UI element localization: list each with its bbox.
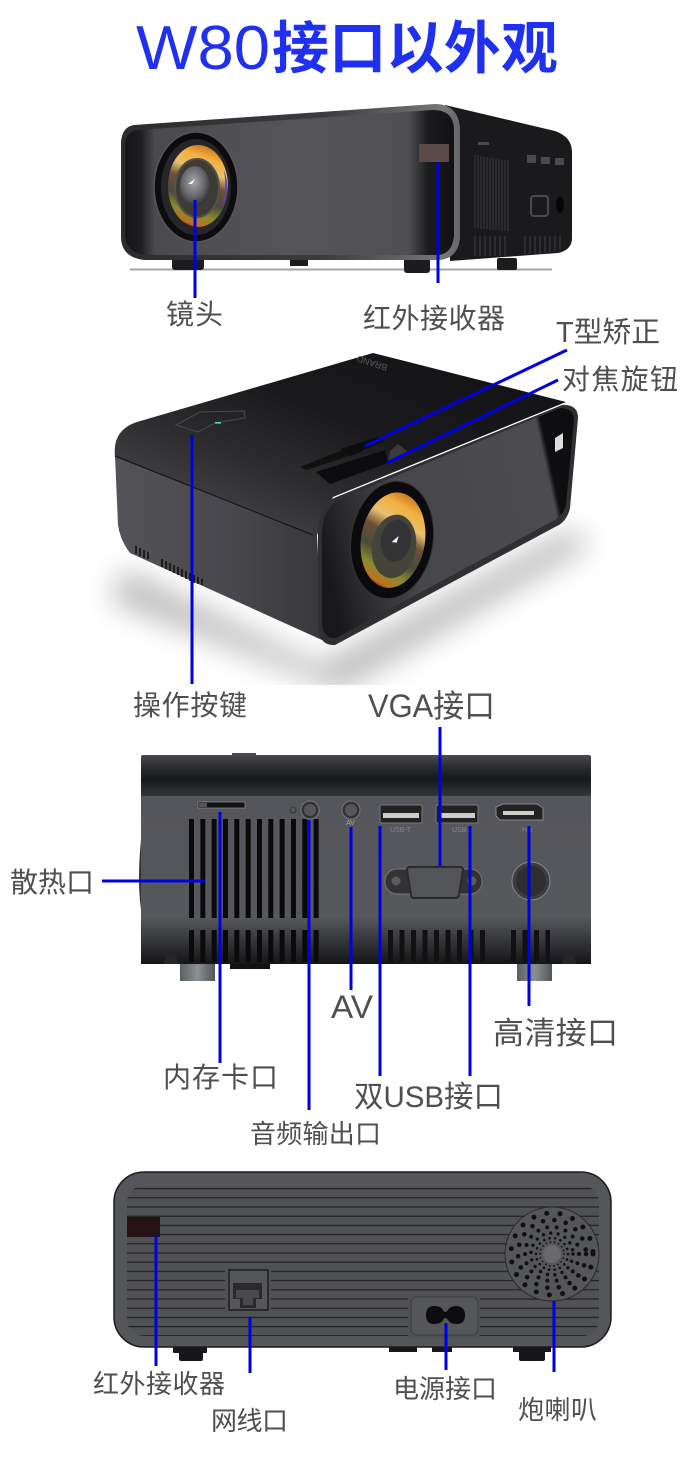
label: memory card: 内存卡口 (163, 1062, 278, 1093)
left side face (115, 456, 322, 640)
top face (115, 353, 566, 535)
label: buttons: 操作按键 (133, 690, 247, 721)
body (141, 796, 591, 964)
ethernet port (225, 1266, 271, 1314)
grooves (127, 1186, 599, 1336)
side ports (478, 142, 564, 216)
indicator (215, 422, 221, 424)
label: lens: 镜头 (166, 299, 223, 330)
usb port 2: USB (452, 827, 467, 834)
top controls (300, 437, 408, 484)
usb port 1 (380, 805, 422, 834)
leader line: T keystone (365, 350, 567, 446)
title: W80 (136, 14, 270, 83)
usb port 2 (436, 805, 478, 834)
panel: front view projector (121, 104, 572, 273)
leader line: HD (528, 826, 530, 1006)
leader line: VGA (438, 727, 442, 866)
leader line: USB left (378, 826, 382, 1076)
leader line: network (248, 1317, 252, 1373)
av jack (342, 801, 360, 827)
label: HD: 高清接口 (493, 1016, 618, 1051)
title: 接口以外观 (272, 17, 558, 81)
infrared window (127, 1217, 160, 1237)
corner screws (164, 954, 576, 964)
lens (350, 481, 434, 598)
leader line: audio (308, 820, 310, 1110)
leader line: infrared receiver (436, 162, 440, 283)
side vents (475, 155, 560, 256)
label: AV: AV (331, 989, 374, 1025)
label: VGA: VGA接口 (368, 688, 495, 724)
vga port (385, 867, 482, 898)
hdmi port: HD (522, 827, 532, 834)
feet (180, 962, 552, 981)
power socket (408, 1294, 480, 1338)
leader line: power (444, 1323, 448, 1370)
front face (121, 104, 460, 260)
title (136, 14, 558, 83)
label: rear infrared: 红外接收器 (93, 1369, 225, 1399)
label: power: 电源接口 (393, 1374, 497, 1404)
leader line: lens (194, 200, 196, 298)
round knob (512, 862, 550, 900)
body (114, 1172, 611, 1347)
vents (136, 546, 202, 585)
speaker grille (505, 1207, 599, 1301)
panel: side view projector (139, 753, 591, 981)
side body (445, 105, 572, 261)
cooling vents (189, 868, 550, 946)
upper band (141, 755, 591, 796)
leader line: USB right (468, 826, 472, 1076)
label: dual USB: 双USB接口 (354, 1081, 503, 1114)
leader line: AV (350, 827, 352, 990)
label: speaker: 炮喇叭 (518, 1395, 597, 1425)
av jack: AV (346, 820, 355, 827)
lens hint (139, 840, 141, 910)
ops buttons (176, 411, 245, 432)
infrared receiver (419, 144, 449, 162)
ground shadow (130, 268, 552, 270)
memory slot (198, 802, 245, 808)
usb port 1: USB-T (390, 827, 412, 834)
label: infrared receiver: 红外接收器 (363, 303, 505, 334)
hdmi port (496, 804, 543, 834)
top bump (232, 753, 256, 756)
leader line: memory card (218, 812, 222, 1063)
lens (154, 132, 238, 242)
front face (318, 405, 578, 645)
feet (173, 1345, 551, 1361)
panel: top view projector (110, 353, 590, 690)
audio jack (290, 801, 319, 819)
label: network: 网线口 (211, 1406, 288, 1436)
panel: back view projector (114, 1172, 611, 1361)
label: audio out: 音频输出口 (250, 1119, 381, 1149)
brand mark: BRAND (355, 353, 389, 373)
leader line: focus knob (387, 380, 558, 463)
feet (172, 258, 517, 273)
leader line: heat vent (102, 880, 205, 882)
label: heat vent: 散热口 (10, 867, 94, 898)
leader line: rear infrared (154, 1236, 158, 1366)
receiver window (555, 433, 563, 452)
leader line: buttons (190, 435, 194, 684)
label: focus knob: 对焦旋钮 (562, 364, 678, 395)
drop shadow (110, 530, 590, 690)
label: T keystone: T型矫正 (556, 316, 660, 349)
leader line: speaker (552, 1301, 556, 1372)
